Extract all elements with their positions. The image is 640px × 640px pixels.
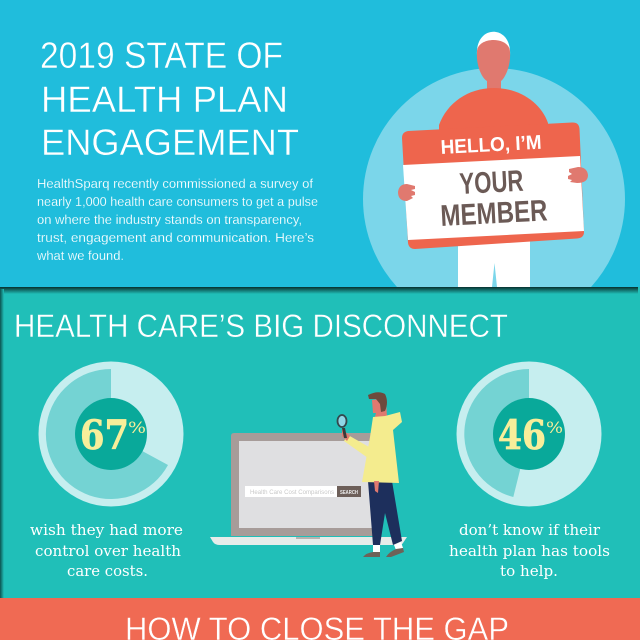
- shoes: [363, 552, 380, 557]
- illustration: laptop with search: [210, 433, 407, 545]
- intro text: trust, engagement and communication. Here’s: [37, 230, 315, 245]
- magnifying glass: [338, 415, 347, 438]
- donut chart: 46%: 46: [498, 412, 546, 459]
- intro text: [36, 176, 318, 263]
- arm: [344, 435, 369, 458]
- donut chart: 46%: [456, 362, 602, 506]
- head and hair: [477, 32, 510, 92]
- background circle: [363, 68, 625, 287]
- title: ENGAGEMENT: [41, 122, 299, 163]
- heading: HEALTH CARE’S BIG DISCONNECT: [14, 308, 508, 344]
- intro text: HealthSparq recently commissioned a survey of: [37, 176, 313, 191]
- hands: [398, 167, 588, 201]
- caption: 67%: control over health: [35, 544, 181, 560]
- title: [40, 35, 299, 163]
- search box: Health Care Cost Comparisons: [250, 489, 335, 496]
- search box: [245, 486, 361, 497]
- intro text: what we found.: [36, 248, 124, 263]
- title: 2019 STATE OF: [40, 35, 283, 76]
- illustration: member holding name tag: [363, 32, 625, 287]
- illustration: person with magnifying glass: [338, 392, 404, 557]
- caption: 46%: health plan has tools: [449, 544, 610, 560]
- head: [372, 398, 387, 420]
- search box: SEARCH: [340, 490, 358, 496]
- intro text: nearly 1,000 health care consumers to get a pulse: [37, 194, 318, 209]
- panel: header: [0, 0, 640, 287]
- legs: [368, 481, 402, 545]
- torso: [439, 88, 548, 140]
- caption: 46%: [449, 523, 610, 580]
- panel: health care's big disconnect: [0, 287, 640, 598]
- caption: 46%: to help.: [500, 564, 558, 580]
- caption: 67%: wish they had more: [30, 523, 183, 539]
- name tag: [402, 122, 584, 249]
- name tag: MEMBER: [440, 194, 548, 233]
- legs: [458, 240, 530, 287]
- caption: 67%: care costs.: [67, 564, 148, 580]
- donut chart: 67%: %: [128, 418, 146, 437]
- jacket: [362, 412, 402, 483]
- panel: how to close the gap: [0, 598, 640, 640]
- caption: 67%: [30, 523, 183, 580]
- title: HEALTH PLAN: [41, 79, 288, 120]
- donut chart: 46%: %: [546, 418, 563, 437]
- donut chart: 67%: 67: [80, 412, 129, 459]
- intro text: on where the industry stands on transparency,: [37, 212, 302, 227]
- name tag: YOUR: [459, 165, 525, 201]
- donut chart: 67%: [38, 362, 184, 506]
- name tag: HELLO, I’M: [440, 132, 542, 159]
- caption: 46%: don’t know if their: [459, 523, 600, 539]
